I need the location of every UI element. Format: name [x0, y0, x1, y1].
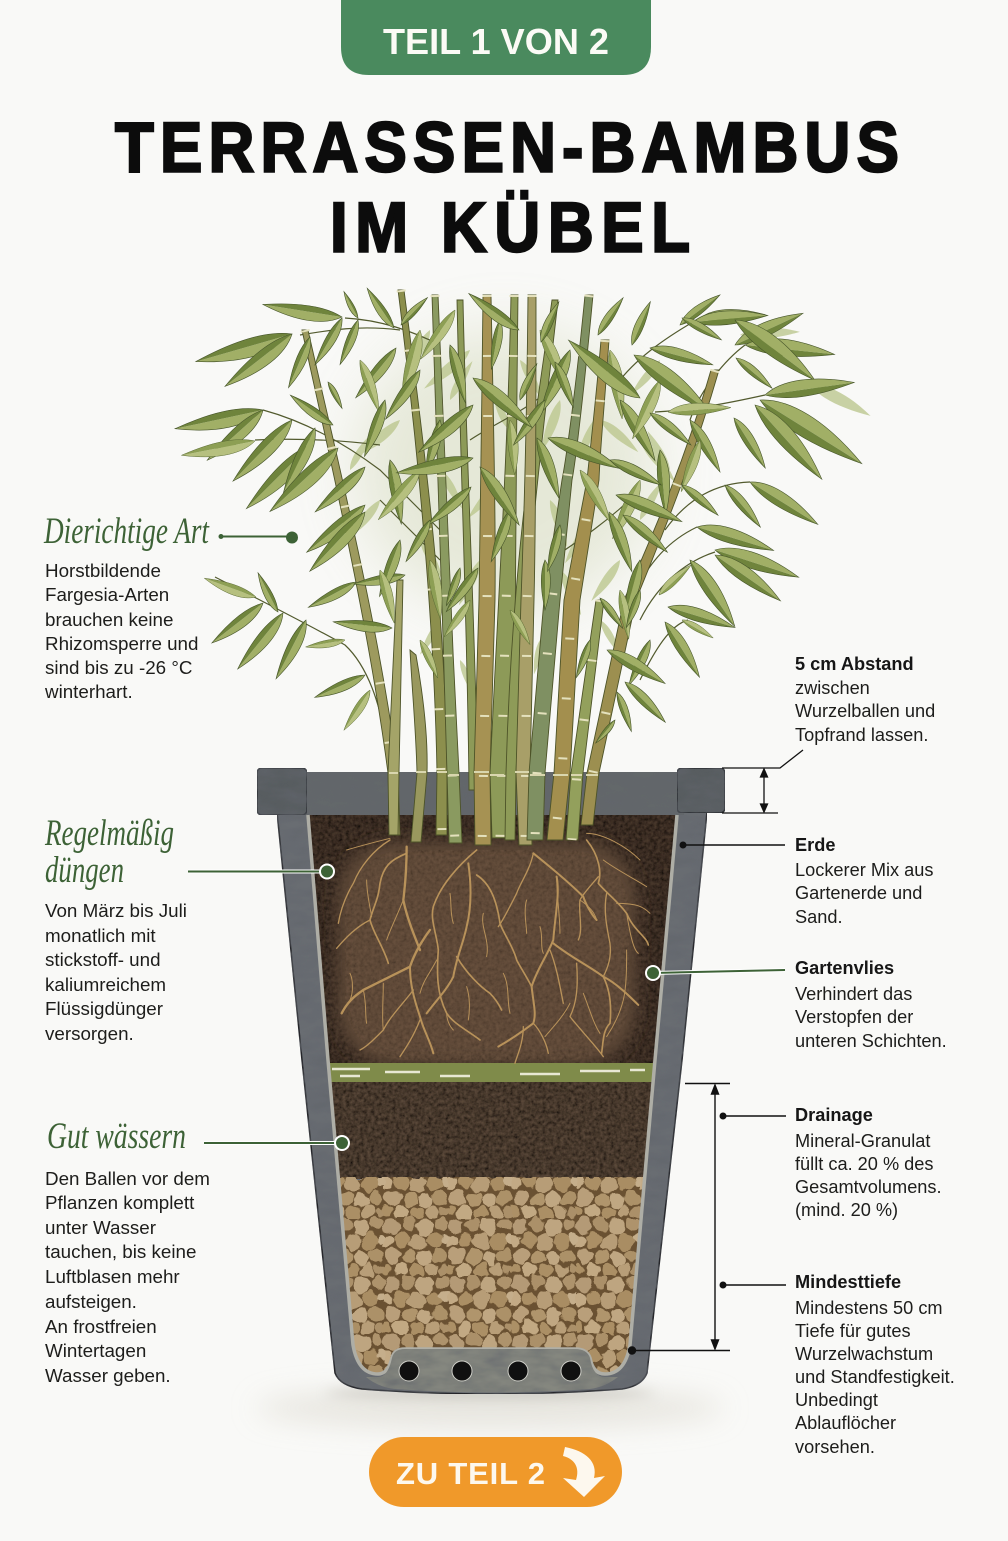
text block: Topfrand lassen. — [795, 725, 928, 745]
gravel layer — [340, 1177, 643, 1372]
annotation: Erde — [680, 835, 933, 927]
text block: Fargesia-Arten — [45, 584, 169, 605]
title: IM KÜBEL — [330, 188, 690, 267]
label: regelmäßig düngen — [44, 813, 334, 1044]
pointer — [646, 966, 785, 980]
icon: arrow — [563, 1447, 605, 1497]
label: regelmäßig düngen: düngen — [45, 850, 124, 891]
header tab: TEIL 1 VON 2 — [383, 21, 609, 62]
soil — [300, 815, 685, 1065]
text block: Verhindert das — [795, 984, 912, 1004]
ground shadow — [255, 1387, 725, 1428]
depth dimension bracket — [628, 1084, 730, 1354]
text block: Horstbildende — [45, 560, 161, 581]
text block: An frostfreien — [45, 1316, 157, 1337]
text block: winterhart. — [44, 681, 133, 702]
annotation: Mindesttiefe — [720, 1272, 955, 1457]
fleece layer — [328, 1063, 655, 1082]
label: regelmäßig düngen: Regelmäßig — [44, 813, 174, 854]
text block: Tiefe für gutes — [795, 1321, 911, 1341]
rim right block — [677, 768, 725, 813]
roots — [337, 833, 650, 1063]
stem nodes near base — [389, 772, 598, 775]
text block: Drainage — [795, 1105, 873, 1125]
text block: 5 cm Abstand — [795, 654, 914, 674]
pointer — [720, 1282, 786, 1288]
text block: Unbedingt — [795, 1390, 878, 1410]
extra leaves, centre — [356, 358, 384, 413]
text block: Gesamtvolumens. — [795, 1177, 942, 1197]
pointer — [188, 864, 334, 878]
text block — [795, 958, 947, 1051]
annotation: Drainage — [720, 1105, 942, 1220]
text block: Wurzelballen und — [795, 701, 935, 721]
text block: Flüssigdünger — [45, 998, 163, 1019]
pointer — [204, 1136, 349, 1150]
inner liner — [308, 815, 677, 1374]
text block: brauchen keine — [45, 609, 173, 630]
label: die richtige Art — [43, 511, 298, 702]
title — [115, 108, 899, 267]
text block: stickstoff- und — [45, 949, 161, 970]
text block: Mineral-Granulat — [795, 1131, 930, 1151]
label: gut wässern — [45, 1116, 349, 1386]
text block: (mind. 20 %) — [795, 1200, 898, 1220]
text block: Sand. — [795, 907, 843, 927]
text block: Wurzelwachstum — [795, 1344, 933, 1364]
pot cross-section — [257, 768, 725, 1394]
text block: Mindestens 50 cm — [795, 1298, 943, 1318]
button: zu Teil 2 — [369, 1437, 622, 1507]
text block: tauchen, bis keine — [45, 1241, 196, 1262]
text block: Den Ballen vor dem — [45, 1168, 210, 1189]
pale background foliage — [345, 326, 874, 694]
text block: Wintertagen — [45, 1340, 146, 1361]
foliage haze — [355, 330, 655, 610]
text block: unter Wasser — [45, 1217, 156, 1238]
pointer — [720, 1112, 786, 1120]
label: die richtige Art: Dierichtige Art — [43, 511, 210, 552]
text block — [795, 835, 933, 927]
root ball texture — [345, 850, 629, 1060]
button: zu Teil 2: ZU TEIL 2 — [396, 1456, 545, 1491]
text block: Mindesttiefe — [795, 1272, 901, 1292]
drainage soil layer — [320, 1082, 665, 1179]
title: TERRASSEN-BAMBUS — [115, 108, 899, 187]
text block: kaliumreichem — [45, 974, 166, 995]
text block: und Standfestigkeit. — [795, 1367, 955, 1387]
stems — [302, 290, 719, 845]
branches — [215, 318, 765, 770]
rim left block — [257, 768, 307, 815]
text block — [45, 900, 187, 1044]
rim band — [300, 772, 684, 815]
text block: Ablauflöcher — [795, 1413, 896, 1433]
pot walls — [277, 812, 707, 1394]
text block: unteren Schichten. — [795, 1031, 947, 1051]
text block: füllt ca. 20 % des — [795, 1154, 934, 1174]
text block: Rhizomsperre und — [45, 633, 198, 654]
text block — [45, 1168, 210, 1386]
pointer — [218, 532, 298, 544]
text block: sind bis zu -26 °C — [45, 657, 192, 678]
text block: versorgen. — [45, 1023, 134, 1044]
text block: Luftblasen mehr — [45, 1266, 180, 1287]
text block: Gartenvlies — [795, 958, 894, 978]
text block — [795, 654, 935, 745]
header tab — [341, 0, 651, 75]
text block: Von März bis Juli — [45, 900, 187, 921]
text block: Pflanzen komplett — [45, 1192, 195, 1213]
text block: aufsteigen. — [45, 1291, 137, 1312]
annotation: Gartenvlies — [646, 958, 947, 1051]
text block: monatlich mit — [45, 925, 156, 946]
bamboo plant — [174, 286, 874, 845]
text block: Gartenerde und — [795, 883, 922, 903]
text block: vorsehen. — [795, 1437, 875, 1457]
pointer — [680, 842, 785, 848]
text block — [44, 560, 198, 702]
drain holes — [399, 1361, 581, 1381]
label: gut wässern: Gut wässern — [47, 1116, 186, 1157]
drain plate — [366, 1349, 618, 1392]
annotation: 5 cm Abstand — [722, 654, 935, 813]
text block: Wasser geben. — [45, 1365, 171, 1386]
dimension marker — [722, 750, 803, 813]
root ball — [338, 842, 636, 1064]
text block: zwischen — [795, 678, 870, 698]
text block: Lockerer Mix aus — [795, 860, 933, 880]
text block: Verstopfen der — [795, 1007, 913, 1027]
pot contents — [300, 815, 685, 1387]
foliage — [174, 286, 869, 745]
text block — [795, 1105, 942, 1220]
text block: Erde — [795, 835, 835, 855]
text block — [795, 1272, 955, 1457]
